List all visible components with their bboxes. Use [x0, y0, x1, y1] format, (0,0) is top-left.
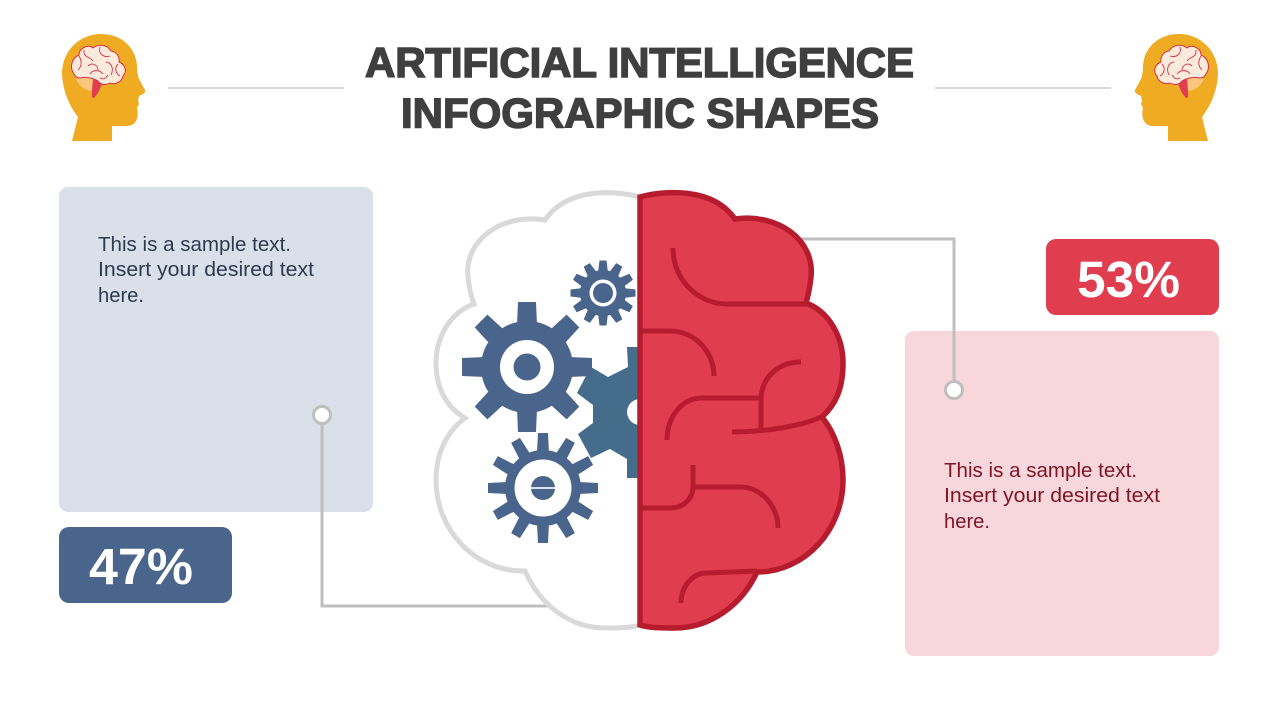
gear: back gear [577, 347, 638, 478]
title [365, 39, 914, 136]
gear: medium [488, 433, 598, 543]
text block: right sample text: here. [944, 510, 990, 533]
title: ARTIFICIAL INTELLIGENCE [365, 39, 914, 86]
brain left half outline [436, 193, 640, 628]
gear: large [462, 302, 592, 432]
brain folds [640, 248, 821, 603]
panel: left text box [59, 187, 373, 512]
text block: left sample text: This is a sample text. [98, 233, 291, 256]
text block: right sample text: This is a sample text. [944, 459, 1137, 482]
text block: left sample text [98, 233, 314, 307]
text block: right sample text [944, 459, 1160, 533]
text block: right sample text: Insert your desired text [944, 484, 1160, 507]
panel: right text box [905, 331, 1219, 656]
badge: 47% [59, 527, 232, 603]
badge: 53%: 53% [1077, 251, 1180, 308]
gear: small [570, 260, 636, 326]
brain right half [640, 193, 843, 628]
text block: left sample text: here. [98, 284, 144, 307]
icon: right head with brain [1135, 34, 1218, 141]
title: INFOGRAPHIC SHAPES [401, 90, 879, 136]
text block: left sample text: Insert your desired text [98, 258, 314, 281]
icon: left head with brain [62, 34, 145, 141]
badge: 47%: 47% [89, 538, 193, 595]
badge: 53% [1046, 239, 1219, 315]
connector: left box to brain [314, 406, 548, 606]
gears [462, 260, 638, 543]
connector: right box to brain [800, 239, 962, 398]
